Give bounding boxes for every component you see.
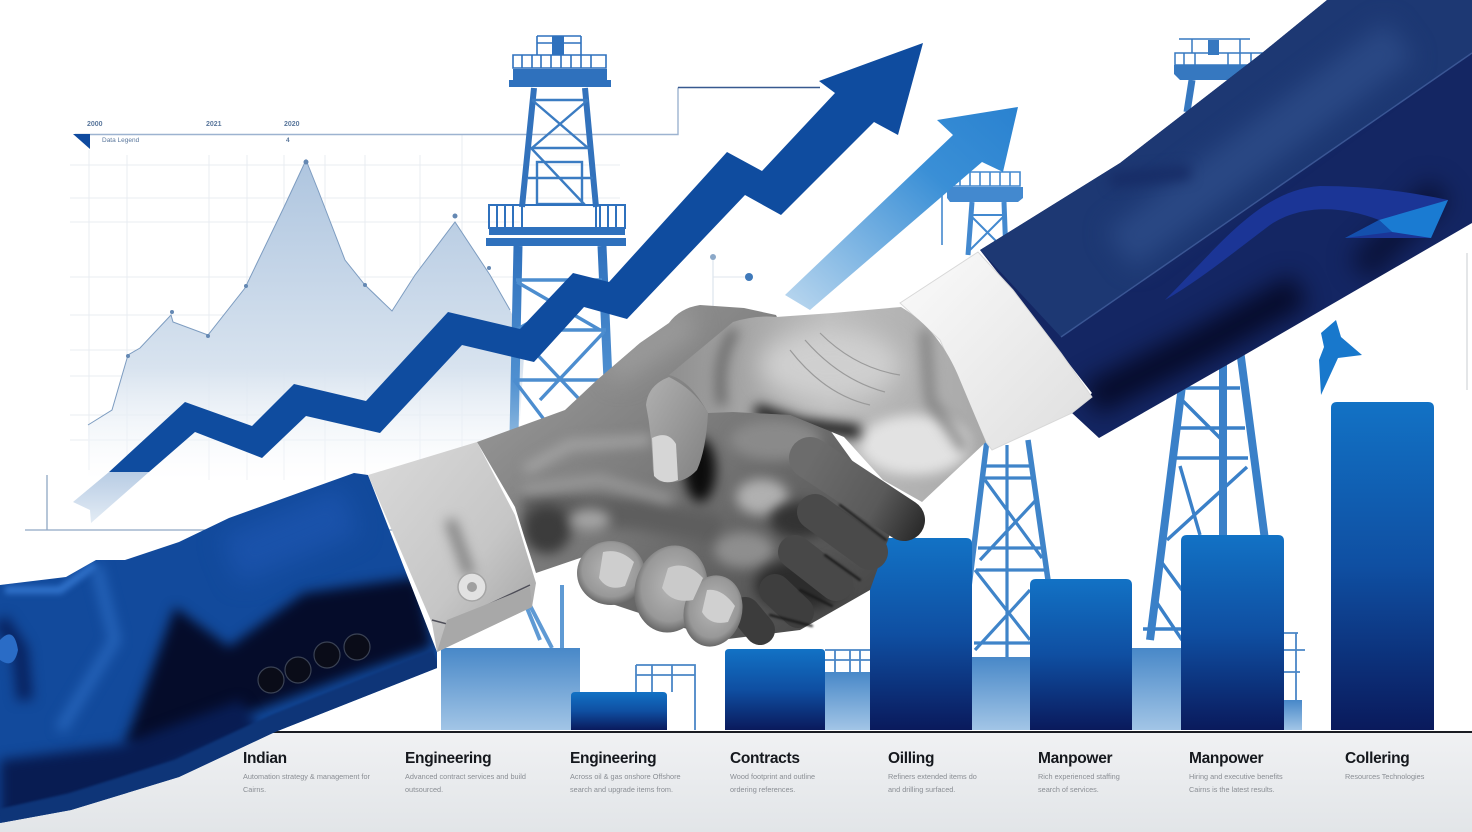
footer column: Manpower 2 <box>1189 750 1283 794</box>
footer column: Engineering 2 <box>570 750 681 794</box>
footer column: Manpower: Rich experienced staffing <box>1038 772 1120 781</box>
oil derrick left <box>486 36 626 650</box>
chart markers <box>126 160 491 358</box>
footer column: Collering: Collering <box>1345 750 1409 767</box>
left sleeve <box>0 473 437 823</box>
right white cuff <box>900 252 1092 450</box>
chart year labels: Data Legend <box>102 137 140 144</box>
handshake <box>477 305 986 653</box>
footer column: Manpower <box>1038 750 1120 794</box>
small blue marker icon <box>1319 320 1362 395</box>
middle deck <box>489 205 625 228</box>
oil derrick right <box>1143 39 1265 640</box>
upper panel sheen <box>980 0 1472 337</box>
large rising arrow <box>73 43 923 523</box>
footer column: Oilling: Refiners extended items do <box>888 772 977 781</box>
footer column: Oilling <box>888 750 977 794</box>
footer column: Engineering: outsourced. <box>405 785 443 794</box>
chart year labels: 2021 <box>206 121 222 128</box>
footer column: Indian <box>243 750 371 794</box>
footer column: Engineering 2: Engineering <box>570 750 656 767</box>
dark blue sleeve swoosh <box>1165 186 1448 300</box>
footer column: Contracts: ordering references. <box>730 785 795 794</box>
chart corner marker <box>73 134 90 149</box>
footer column: Collering: Resources Technologies <box>1345 772 1425 781</box>
footer column: Manpower: Manpower <box>1038 750 1113 767</box>
front fingers <box>577 537 750 653</box>
right sleeve <box>980 0 1472 438</box>
lighter palm hand <box>669 307 986 502</box>
sleeve buttons <box>258 634 370 693</box>
area chart <box>88 160 525 480</box>
thumb nail <box>652 435 678 482</box>
thin vertical guide <box>1466 253 1468 390</box>
sleeve sheen <box>230 510 350 560</box>
line chart panel <box>70 88 678 480</box>
left grey cuff <box>368 442 536 652</box>
footer column: Engineering: Engineering <box>405 750 491 767</box>
sleeve dark folds <box>125 577 432 753</box>
derrick base legs <box>522 585 562 650</box>
arrow fade tail <box>73 472 149 523</box>
chart year labels: 2020 <box>284 121 300 128</box>
dark fingers <box>745 458 904 630</box>
footer column: Manpower 2: Cairns is the latest results. <box>1189 785 1275 794</box>
lower section <box>514 246 608 435</box>
cuff button <box>458 573 486 601</box>
baseline axis <box>25 475 400 530</box>
lower panel shadow <box>1090 290 1300 400</box>
footer column: Manpower: search of services. <box>1038 785 1099 794</box>
oil derrick centre <box>942 172 1048 660</box>
footer column: Collering <box>1345 750 1425 781</box>
sleeve hem <box>0 660 437 820</box>
footer column: Oilling: Oilling <box>888 750 934 767</box>
footer band <box>0 733 1472 832</box>
footer column: Contracts <box>730 750 815 794</box>
chart year labels: 2000 <box>87 121 103 128</box>
footer column: Engineering <box>405 750 526 794</box>
footer column: Contracts: Contracts <box>730 750 800 767</box>
footer column: Engineering: Advanced contract services and build <box>405 772 526 781</box>
hand shading <box>522 320 845 610</box>
footer column: Indian: Automation strategy & management for <box>243 772 371 781</box>
area outline <box>88 160 510 425</box>
bright blue sleeve swoosh <box>1379 200 1448 238</box>
footer column: Manpower 2: Manpower <box>1189 750 1264 767</box>
footer column: Manpower 2: Hiring and executive benefits <box>1189 772 1283 781</box>
footer column: Contracts: Wood footprint and outline <box>730 772 815 781</box>
centre derrick lower <box>960 440 1048 660</box>
chart year labels: 4 <box>286 137 290 144</box>
thumb <box>646 377 708 482</box>
footer column: Oilling: and drilling surfaced. <box>888 785 955 794</box>
footer column: Indian: Cairns. <box>243 785 266 794</box>
palm shading <box>720 330 970 475</box>
upper connector line <box>678 86 820 88</box>
background railings <box>636 633 1305 730</box>
background light bars <box>441 648 1302 730</box>
right derrick lower <box>1150 350 1265 640</box>
small data points <box>710 254 753 330</box>
footer column: Engineering 2: Across oil & gas onshore Offshore <box>570 772 681 781</box>
footer rule <box>270 731 1472 733</box>
grey hand back <box>477 305 895 640</box>
chart axis lines <box>75 88 678 134</box>
finger nails <box>599 551 634 588</box>
bar chart <box>571 402 1434 730</box>
secondary rising arrow <box>785 107 1018 310</box>
chart year labels <box>87 121 300 144</box>
footer column: Indian: Indian <box>243 750 287 767</box>
upper section <box>522 88 596 207</box>
footer column: Engineering 2: search and upgrade items from. <box>570 785 673 794</box>
